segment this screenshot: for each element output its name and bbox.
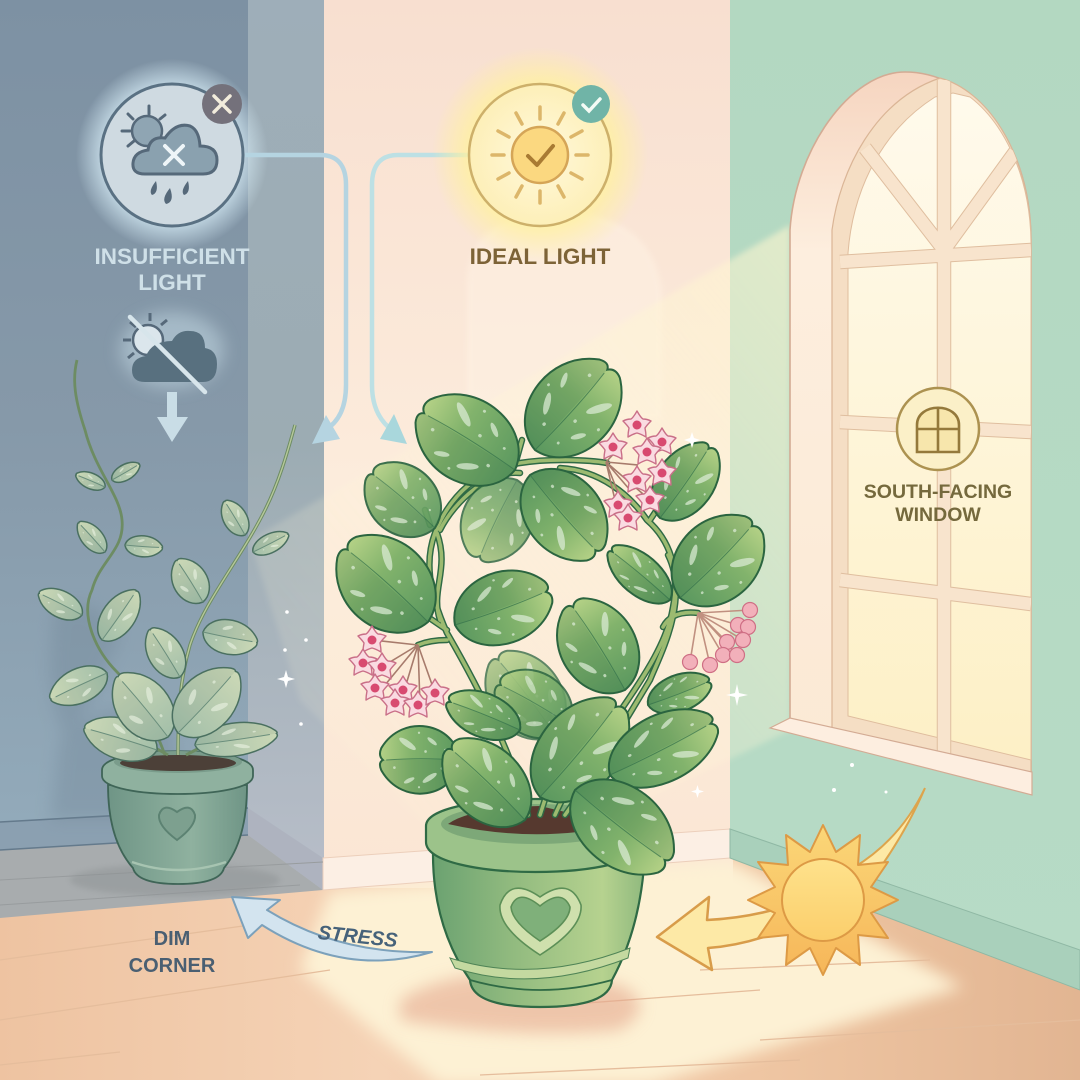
stressed plant shadow [50, 604, 190, 820]
label: ideal light: IDEAL LIGHT [470, 244, 611, 269]
label: dim corner [129, 928, 216, 977]
pot heart [500, 888, 581, 955]
arrow: ideal light to plant [372, 155, 470, 444]
arrow: sunlight toward plant [657, 788, 925, 970]
small pot with heart [70, 751, 280, 896]
overhanging leaf [550, 759, 692, 894]
window light beam [250, 225, 790, 880]
pale leaves [33, 457, 292, 769]
flower cluster: left [349, 626, 449, 717]
window reveal [790, 72, 1031, 792]
icon: insufficient light [76, 59, 268, 251]
label: stress: STRESS [317, 922, 399, 952]
icon: sun [748, 825, 898, 975]
label: south-facing window: SOUTH-FACING [864, 481, 1012, 503]
leaves [316, 339, 783, 846]
label: dim corner: CORNER [129, 955, 216, 977]
icon: ideal light [432, 47, 648, 263]
icon: window badge [897, 388, 979, 470]
label: insufficient light: INSUFFICIENT [94, 244, 250, 269]
flower cluster: top [599, 411, 676, 530]
badge: cross [202, 84, 242, 124]
stems [418, 440, 698, 815]
panel: south-facing window: WINDOW [895, 504, 981, 526]
label: dim corner: DIM [154, 928, 190, 950]
panel: healthy hoya plant [316, 339, 783, 1033]
panel: south-facing window [770, 72, 1032, 795]
window frame and panes [832, 78, 1031, 778]
label: insufficient light [94, 244, 250, 295]
window muntins [840, 80, 1031, 760]
panel: stressed plant in dim corner [33, 360, 295, 896]
badge: check [572, 85, 610, 123]
lit floor [300, 860, 963, 1080]
label: insufficient light: LIGHT [138, 270, 206, 295]
window sill [832, 728, 1031, 780]
flower cluster: right, buds [682, 602, 758, 672]
arrow: insufficient light to dim corner [245, 155, 346, 444]
sparkles [277, 432, 888, 798]
icon: blocked sun and down arrow [120, 312, 224, 442]
vines [75, 360, 295, 755]
arrow: stress [232, 897, 432, 961]
large pot with heart [400, 799, 645, 1033]
